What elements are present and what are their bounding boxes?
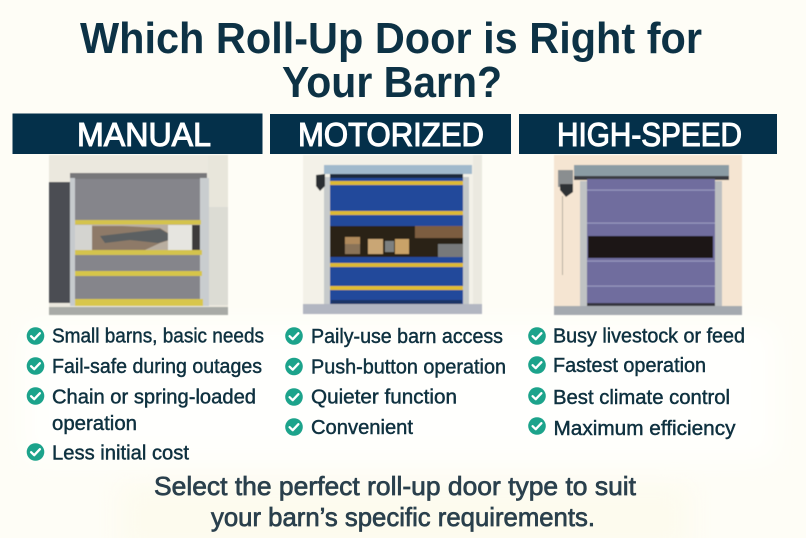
list: manual features — [27, 324, 264, 464]
item: push-button: Push-button operation — [311, 356, 506, 378]
header: manual: MANUAL — [77, 116, 211, 153]
item: convenient: Convenient — [311, 416, 413, 439]
item: chain or spring-loaded — [27, 386, 256, 435]
title: Your Barn? — [282, 58, 502, 107]
item: chain or spring-loaded: Chain or spring-loaded — [52, 386, 256, 408]
item: chain or spring-loaded: operation — [52, 412, 137, 435]
footer caption: Select the perfect roll-up door type to suit — [154, 471, 637, 501]
header: manual — [12, 114, 262, 154]
photo: manual roll-up door — [49, 155, 228, 315]
header: motorized: MOTORIZED — [298, 116, 484, 153]
list: high-speed features — [528, 324, 745, 440]
footer caption — [154, 471, 637, 532]
item: small barns: Small barns, basic needs — [52, 324, 264, 348]
item: fail-safe: Fail-safe during outages — [52, 355, 262, 378]
item: efficiency: Maximum efficiency — [554, 417, 736, 440]
title — [80, 14, 702, 107]
item: daily-use: Paily-use barn access — [311, 325, 503, 348]
item: less initial cost: Less initial cost — [52, 442, 189, 464]
list: motorized features — [285, 325, 506, 439]
photo: motorized roll-up door — [303, 155, 482, 314]
item: busy livestock: Busy livestock or feed — [553, 324, 745, 348]
item: climate: Best climate control — [553, 386, 730, 409]
footer caption: your barn’s specific requirements. — [211, 502, 595, 532]
header: high-speed: HIGH-SPEED — [557, 116, 742, 153]
item: fastest: Fastest operation — [553, 354, 706, 377]
title: Which Roll-Up Door is Right for — [80, 14, 702, 63]
photo: high-speed roll-up door — [554, 155, 742, 315]
item: quieter: Quieter function — [311, 386, 457, 408]
